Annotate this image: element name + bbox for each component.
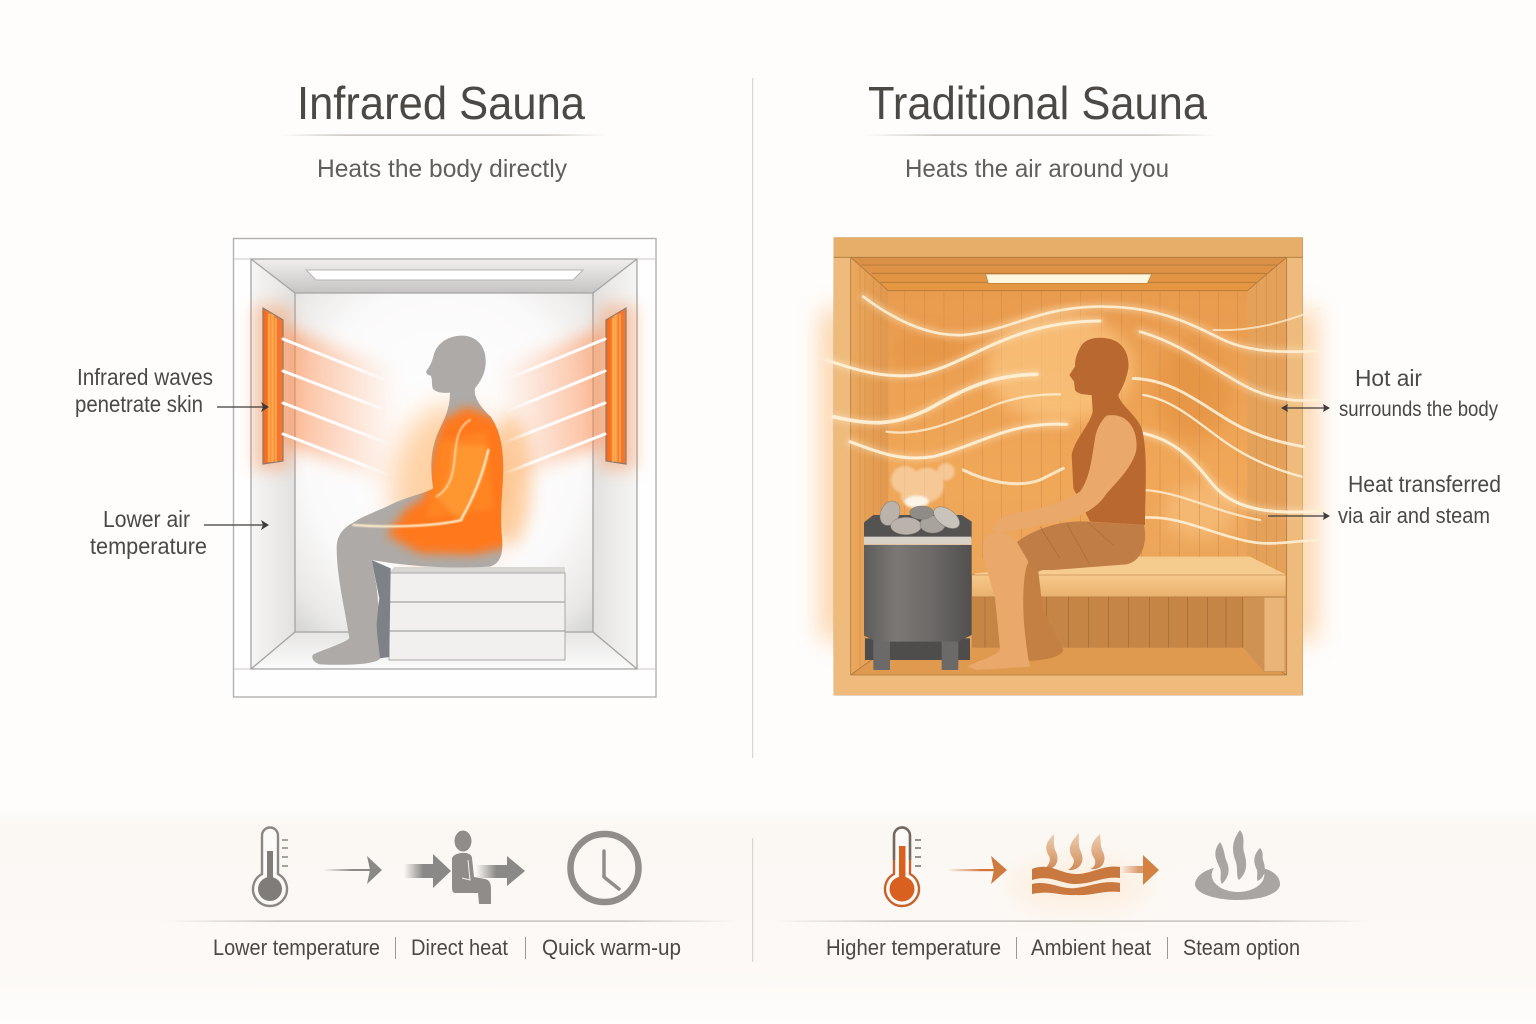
summary labels: Lower temperature <box>213 935 380 960</box>
bench <box>389 567 565 660</box>
title rule <box>865 134 1217 136</box>
infrared rays left <box>283 339 392 476</box>
seated figure <box>967 338 1146 670</box>
summary labels <box>213 935 681 960</box>
warm glow around cabin <box>823 310 1314 640</box>
callout: lower air temperature: Lower air <box>103 506 190 532</box>
panel: infrared sauna cabin <box>234 238 656 697</box>
body silhouette <box>312 336 503 665</box>
title: infrared: Infrared Sauna <box>297 77 585 129</box>
rim <box>864 515 972 538</box>
frame posts <box>834 257 1303 695</box>
right wall <box>593 259 637 669</box>
stones <box>876 498 963 535</box>
panel: traditional summary <box>775 828 1370 960</box>
steam <box>891 463 955 508</box>
far leg <box>1017 562 1063 661</box>
bottom summary band <box>0 805 1536 1024</box>
right wall <box>1247 257 1287 675</box>
top and bottom frame lines <box>234 259 656 669</box>
back wall <box>888 291 1247 649</box>
seated figure with heated torso <box>312 336 517 665</box>
heading: infrared sauna <box>280 77 606 183</box>
legs <box>865 638 970 660</box>
sauna heater with stones <box>864 463 972 670</box>
callout: lower air temperature <box>90 506 269 559</box>
left wall <box>251 259 295 669</box>
towel <box>1013 521 1145 570</box>
callout: hot air surrounds the body: Hot air <box>1355 365 1422 391</box>
plank lines <box>860 257 1277 668</box>
ceiling light <box>986 274 1152 283</box>
under-bench panel <box>972 597 1263 648</box>
summary rule <box>165 920 735 922</box>
icon: thermometer low <box>253 828 288 906</box>
arm <box>992 415 1137 533</box>
warm glow <box>1010 860 1150 910</box>
cabin outer frame <box>234 238 656 697</box>
lower centre divider <box>752 838 753 962</box>
orange heat glow <box>254 305 636 575</box>
top beam <box>834 238 1303 257</box>
summary labels: Ambient heat <box>1031 935 1151 960</box>
summary labels: Higher temperature <box>826 935 1001 960</box>
icon: steam <box>1195 830 1280 900</box>
ceiling light <box>306 270 583 280</box>
callout: infrared waves penetrate skin <box>75 364 269 417</box>
left infrared emitter <box>263 308 283 464</box>
icon: person with heat arrows <box>404 830 525 904</box>
arrow: temperature to direct heat <box>323 856 382 884</box>
callout: lower air temperature: temperature <box>90 533 207 559</box>
icon: thermometer high <box>885 828 921 906</box>
callout: hot air surrounds the body <box>1281 365 1498 421</box>
outer wood frame <box>834 238 1303 695</box>
far leg <box>372 560 391 658</box>
back wall <box>295 293 593 632</box>
title rule <box>280 134 606 136</box>
summary labels: Steam option <box>1183 935 1300 960</box>
icon: clock <box>570 834 638 902</box>
title: traditional: Traditional Sauna <box>868 77 1207 129</box>
ceiling <box>851 257 1287 291</box>
torso and head <box>1069 338 1146 525</box>
floor <box>851 648 1287 675</box>
subtitle: infrared: Heats the body directly <box>317 155 567 183</box>
silver band <box>864 537 971 545</box>
summary rule <box>775 920 1370 922</box>
callout: heat transferred via air and steam: Heat transferred <box>1348 471 1501 497</box>
arm highlights <box>353 420 488 526</box>
bench <box>972 557 1287 672</box>
drum <box>864 545 972 642</box>
callout: heat transferred via air and steam <box>1268 471 1501 528</box>
summary labels <box>826 935 1300 960</box>
callout: heat transferred via air and steam: via air and steam <box>1338 503 1490 528</box>
heading: traditional sauna <box>865 77 1217 183</box>
panel: traditional sauna cabin <box>823 238 1320 695</box>
summary labels: Direct heat <box>411 935 508 960</box>
body heat overlay <box>387 407 517 555</box>
wall light patches <box>893 332 1237 538</box>
inner light glow <box>987 315 1133 422</box>
ceiling slats <box>834 257 1303 675</box>
summary labels: Quick warm-up <box>542 935 681 960</box>
left wall <box>851 257 888 675</box>
icon: ambient heat waves <box>1032 833 1120 895</box>
arrow: ambient heat to steam <box>1120 855 1159 885</box>
centre divider <box>752 78 753 758</box>
room edges <box>251 259 637 669</box>
towel folds <box>1040 522 1113 565</box>
arrow: temperature to ambient heat <box>947 856 1007 884</box>
panel: infrared summary <box>165 828 735 960</box>
ceiling <box>251 259 637 293</box>
callout: infrared waves penetrate skin: Infrared waves <box>77 364 213 390</box>
near leg <box>967 532 1030 670</box>
subtitle: traditional: Heats the air around you <box>905 155 1169 183</box>
right infrared emitter <box>606 308 626 464</box>
infrared rays right <box>503 339 605 474</box>
hot air waves <box>827 297 1320 543</box>
callout: infrared waves penetrate skin: penetrate skin <box>75 391 203 417</box>
floor <box>251 632 637 669</box>
callout: hot air surrounds the body: surrounds the body <box>1339 398 1498 421</box>
